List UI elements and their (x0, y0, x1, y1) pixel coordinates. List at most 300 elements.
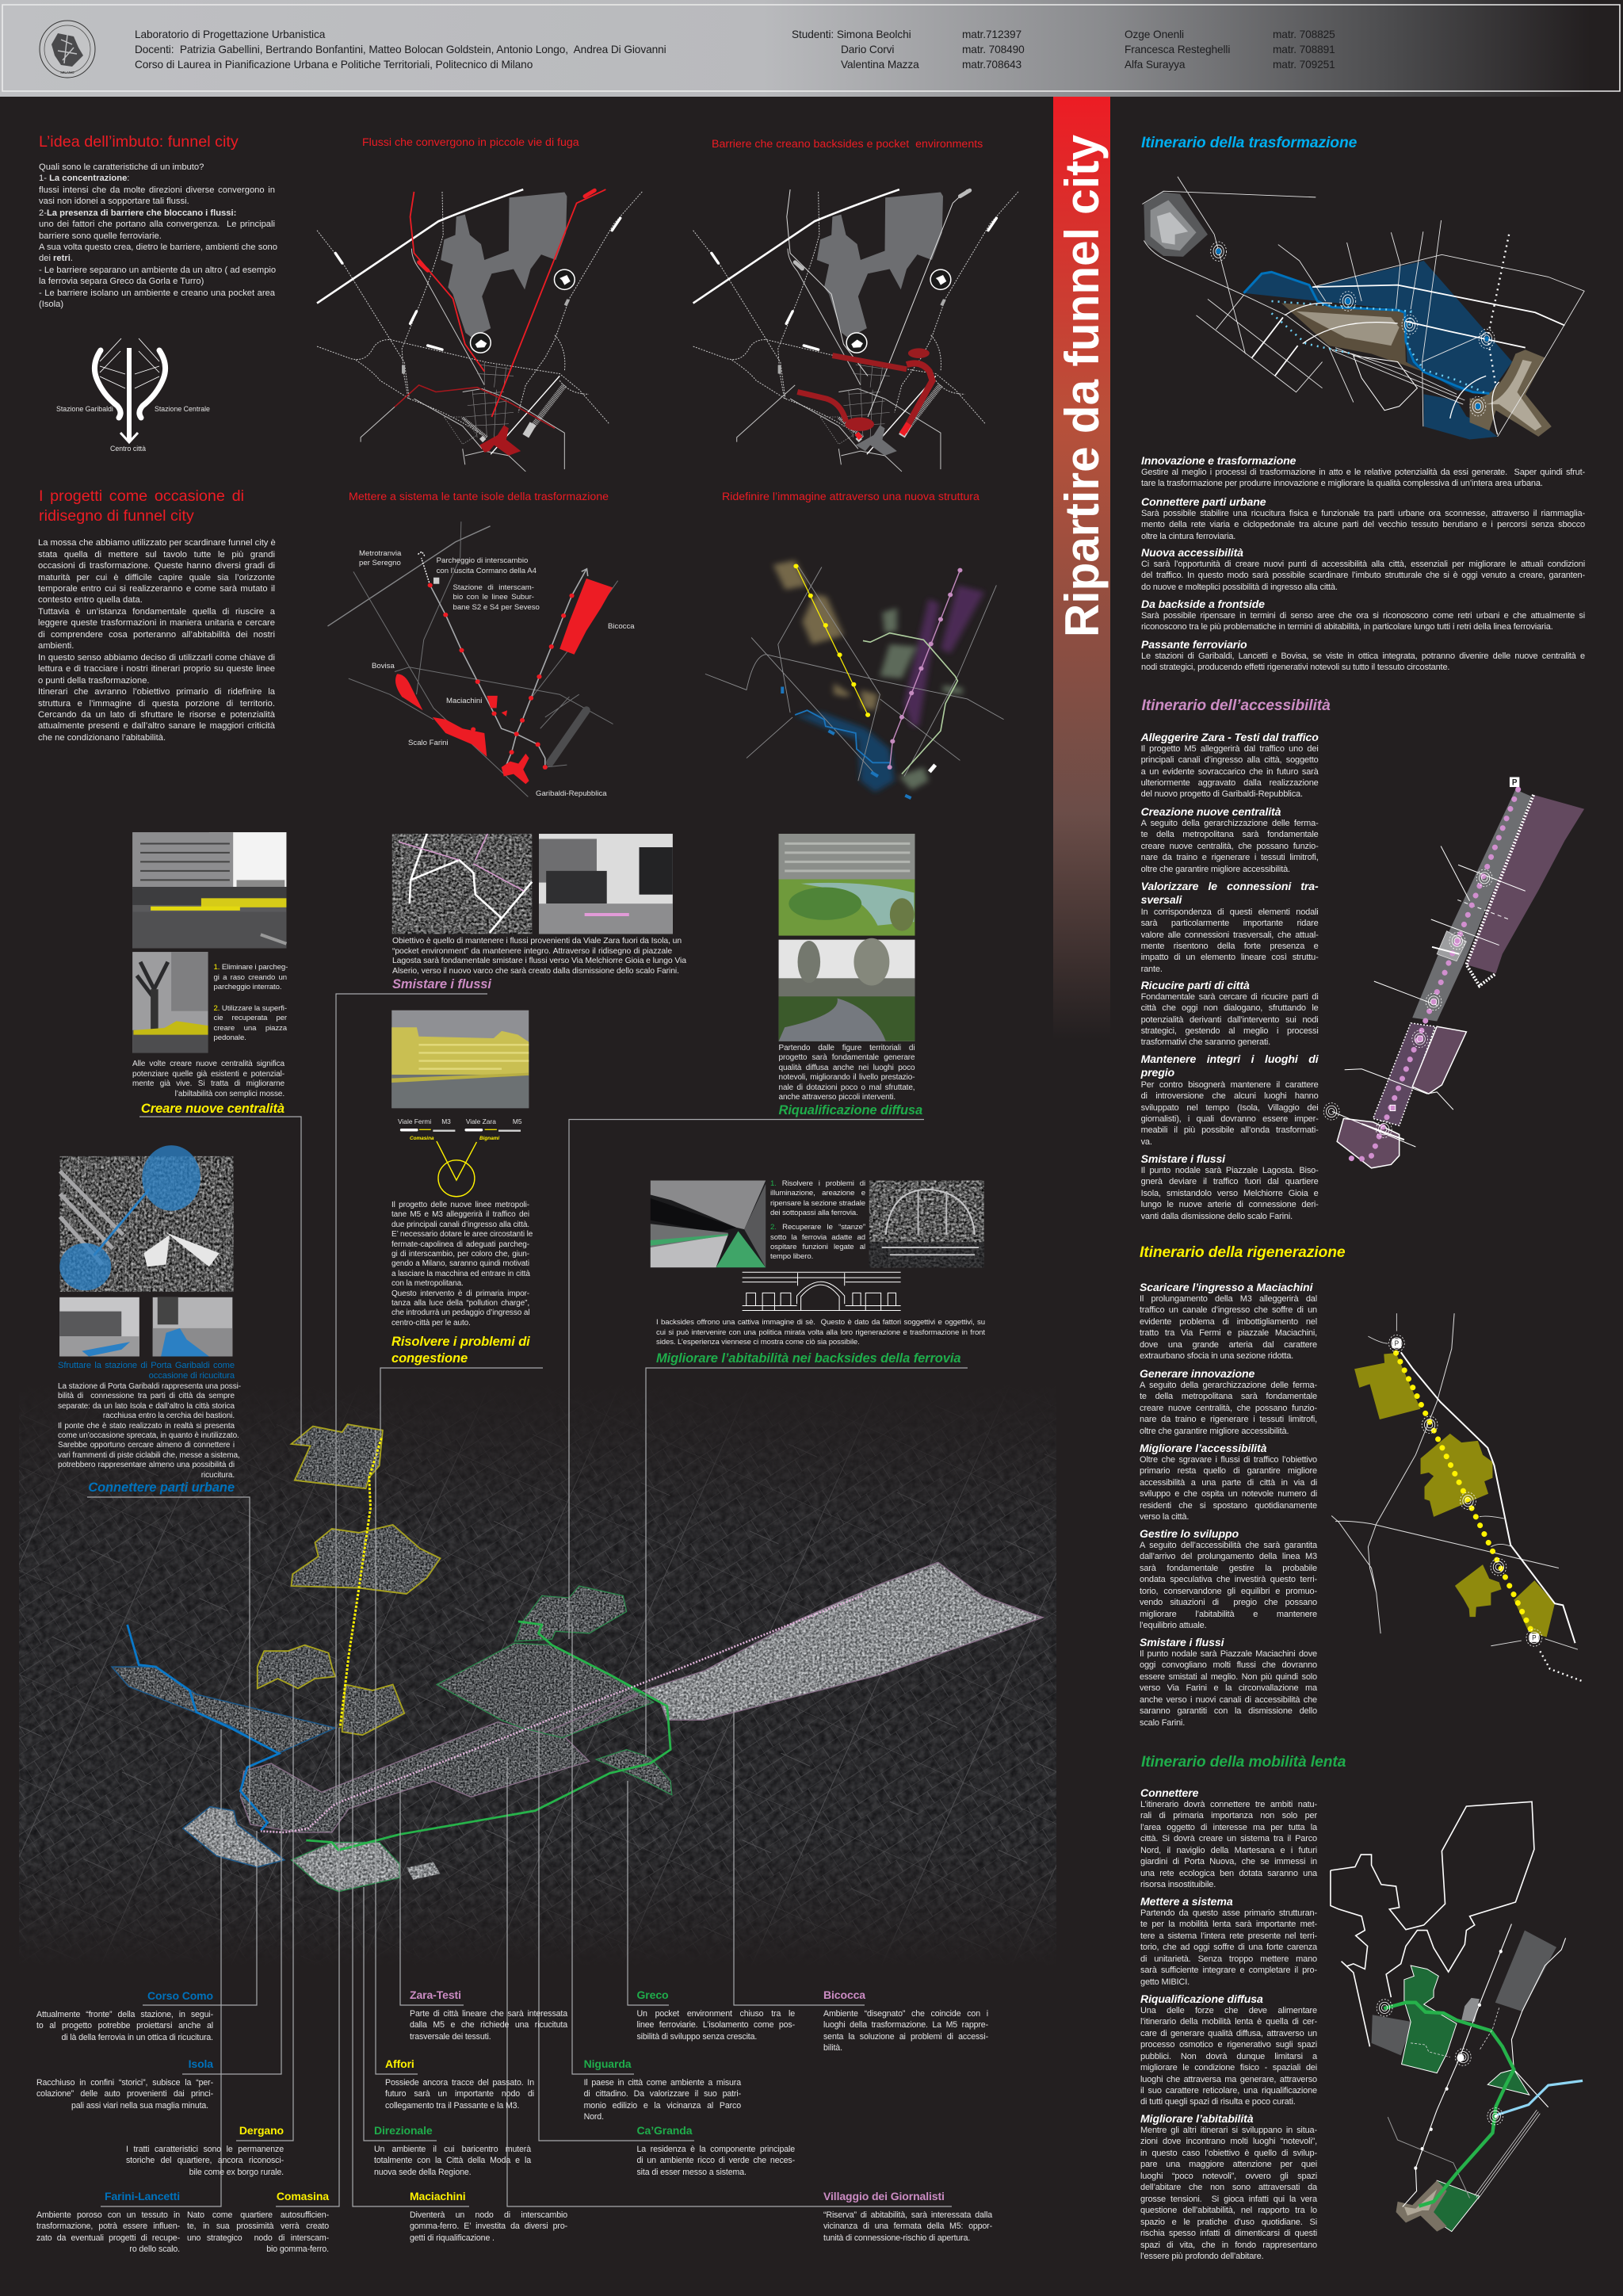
section: Passante ferroviario: nodi strategici, producendo effetti rigenerativi notevoli su tutto il tessuto circostante. (1141, 663, 1449, 672)
block: Zara-Testi (410, 1988, 567, 2042)
block: Ca'Granda: La residenza è la componente principale (637, 2145, 795, 2154)
map title: flows: Flussi che convergono in piccole vie di fuga (362, 136, 579, 149)
block: Niguarda: Il paese in città come ambiente a misura (584, 2078, 741, 2088)
header text: students first column (792, 29, 919, 70)
label: Centro citta: Centro città (110, 445, 146, 453)
section: Migliorare l'accessibilita: primario resta quello di garantire migliore (1140, 1466, 1317, 1476)
section: Mantenere integri i luoghi di pregio: meabili il più possibile all’onda trasformati- (1141, 1125, 1319, 1135)
block: Maciachini: gomma-ferro. E’ investita da diversi pro- (410, 2222, 567, 2231)
section: Migliorare l'accessibilita: accessibilità a una parte di città in via di (1140, 1478, 1317, 1488)
section: Connettere: una rete ecologica ben dotata saranno una (1140, 1869, 1317, 1878)
block: Villaggio dei Giornalisti: vicinanza di una fermata della M5: oppor- (823, 2222, 992, 2231)
header text: student numbers second column: matr. 708825 (1273, 29, 1335, 40)
title band (1053, 97, 1110, 1040)
block: Farini-Lancetti: trasformazione, potrà essere influen- (36, 2222, 180, 2231)
section: Migliorare l'accessibilita: Oltre che sgravare i flussi di traffico l’obiettivo (1140, 1455, 1317, 1465)
text: Porta Garibaldi station: ricucitura. (201, 1471, 235, 1480)
section: Nuova accessibilita: Nuova accessibilità (1141, 546, 1243, 559)
block: Niguarda: di cittadino. Da valorizzare il suo patri- (584, 2089, 741, 2099)
section: Migliorare l'abitabilita (1140, 2112, 1317, 2262)
section: Ricucire parti di citta: potenzialità derivanti dall’intervento sui nodi (1141, 1014, 1319, 1024)
text: projects: temporale entro cui si realizzeranno e come sarà mutato il (38, 584, 275, 594)
section: Generare innovazione: creare nuove centralità, che possano funzio- (1140, 1404, 1317, 1413)
labels: metro diagram top: Viale Fermi M3 Viale Zara M5 (398, 1117, 522, 1125)
section: Mettere a sistema: torio, che ad oggi soffre di una forte carenza (1140, 1943, 1317, 1952)
section: Migliorare l'accessibilita: Migliorare l’accessibilità (1140, 1442, 1266, 1454)
text: funnel idea: 2-La presenza di barriere che bloccano i flussi: barriere sono quelle ferroviarie. dei retri. la ferrovia separa Greco da Gorla e Turro) (Isola) (39, 208, 236, 309)
label: Bignami: Bignami (479, 1136, 499, 1141)
text: projects: In questo senso abbiamo deciso di utilizzarli come chiave di (38, 653, 275, 663)
photo: station building (59, 1297, 139, 1356)
text: funnel idea: Quali sono le caratteristiche di un imbuto? (39, 162, 204, 172)
text: create new centres (132, 1060, 285, 1098)
block: Corso Como: to al progetto potrebbe proiettarsi anche al (36, 2021, 213, 2030)
text: Porta Garibaldi station: Sfruttare la stazione di Porta Garibaldi come (58, 1360, 235, 1370)
section: Valorizzare le connessioni trasversali: Valorizzare le connessioni tra- (1141, 880, 1319, 892)
section: Riqualificazione diffusa: Una delle forze che deve alimentare (1140, 2006, 1317, 2015)
text: create new centres: Alle volte creare nuove centralità significa (132, 1060, 285, 1068)
text: solve congestion: fermate-capolinea di adeguati parcheg- (391, 1240, 529, 1249)
section: Valorizzare le connessioni trasversali: valore alle connessioni trasversali, che attual- (1141, 930, 1319, 940)
map label: Scalo Farini: Scalo Farini (408, 739, 449, 747)
section: Scaricare l'ingresso a Maciachini: Scaricare l’ingresso a Maciachini (1140, 1281, 1312, 1293)
map: slow mobility itinerary (1331, 1801, 1583, 2232)
block: Bicocca: bilità. (823, 2043, 842, 2053)
section: Mettere a sistema: sarà sufficiente integrare e completare il pro- (1140, 1966, 1317, 1975)
text: projects: attualmente presenti e dall’altro sanare le maggiori criticità (38, 721, 275, 731)
block: Comasina: Nato come quartiere autosufficien- (187, 2210, 329, 2220)
photo: yellow parking building (391, 1010, 529, 1108)
text: sort the flows: “pocket environment” da mantenere integro. Attraverso il ridisegno di piazzale (392, 946, 672, 956)
photo: Isola aerial with routes (392, 834, 532, 934)
block: Farini-Lancetti: zato da eventuali progetti di recupe- (36, 2233, 180, 2243)
text: Porta Garibaldi station (58, 1360, 241, 1480)
block: Bicocca (823, 1988, 988, 2054)
section: Da backside a frontside: Da backside a frontside (1141, 598, 1265, 610)
block: Greco (637, 1988, 795, 2042)
section: Gestire lo sviluppo: migliorare l’abitabilità e mantenere (1140, 1610, 1317, 1619)
header text: laboratory: Corso di Laurea in Pianificazione Urbana e Politiche Territoriali, Politecnico di Milano (135, 59, 533, 70)
section: Smistare i flussi (accessibility): Smistare i flussi (1141, 1152, 1225, 1165)
block: Dergano: I tratti caratteristici sono le permanenze (126, 2145, 284, 2154)
block: Zara-Testi: Zara-Testi (410, 1988, 461, 2001)
text: projects: Cercando da un lato di sfruttare le risorse e potenzialità (38, 710, 275, 720)
map label: Metrotranvia: Metrotranvia (359, 549, 401, 558)
text: backside steps: sotto la ferrovia adatte ad (770, 1233, 865, 1242)
section: Da backside a frontside: Sarà possibile ripensare in termini di senso aree che ora si riconoscono come retri urbani e che attualmente si (1141, 611, 1585, 621)
block: Direzionale: Un ambiente il cui baricentro muterà (374, 2145, 531, 2154)
section: Smistare i flussi (accessibility): gnerà deviare il traffico fuori dal quartiere (1141, 1177, 1319, 1186)
heading: transformation itinerary: Itinerario della trasformazione (1141, 135, 1357, 151)
header text: laboratory: Laboratorio di Progettazione Urbanistica (135, 29, 325, 40)
section: Smistare i flussi (regeneration): Il punto nodale sarà Piazzale Maciachini dove (1140, 1649, 1317, 1659)
block: Comasina: uno strategico nodo di interscam- (187, 2233, 329, 2243)
section: Migliorare l'abitabilita: pare una maggiore attenzione per quei (1140, 2160, 1317, 2169)
section: Valorizzare le connessioni trasversali: mente risentono della forte presenza e (1141, 942, 1319, 951)
district outlines: regeneration (258, 1424, 441, 1735)
text: backsides: I backsides offrono una cattiva immagine di sè. Questo è dato da fattori soggettivi e oggettivi, su (656, 1318, 985, 1327)
heading: create new centres: Creare nuove centralità (141, 1102, 285, 1116)
text: funnel idea: - Le barriere isolano un ambiente e creano una pocket area (39, 288, 275, 298)
heading: accessibility itinerary: Itinerario dell’accessibilità (1141, 697, 1331, 714)
text: create new centres steps: cie recuperata per (214, 1014, 287, 1022)
header text: student numbers first column (962, 29, 1025, 70)
section: Ricucire parti di citta: Ricucire parti di città (1141, 979, 1250, 991)
section: Smistare i flussi (regeneration): oggi convogliano molti flussi che dovranno (1140, 1660, 1317, 1670)
text: Porta Garibaldi station: bilità di connessione tra parti di città da sempre (58, 1392, 235, 1400)
section: Smistare i flussi (regeneration): saranno garantiti con la dismissione dello (1140, 1706, 1317, 1716)
heading: sort the flows: Smistare i flussi (392, 976, 491, 991)
header text: student numbers second column: matr. 709251 (1273, 59, 1335, 70)
section: Innovazione e trasformazione: Innovazione e trasformazione (1141, 454, 1296, 467)
map: regeneration itinerary (1331, 1313, 1583, 1681)
section: Ricucire parti di citta (1141, 979, 1319, 1049)
section: Smistare i flussi (accessibility): Isola, smistandolo verso Melchiorre Gioia e (1141, 1189, 1319, 1198)
text: backside steps (770, 1179, 865, 1261)
map title: structure: Ridefinire l’immagine attraverso una nuova struttura (722, 491, 980, 503)
text: funnel idea: 1- La concentrazione: vasi non idonei a sopportare tali flussi. (39, 174, 189, 206)
block: Villaggio dei Giornalisti (823, 2189, 992, 2244)
map label: Stazione di interscambio: bio con le linee Subur- (453, 593, 534, 602)
text: projects: lettura e di tracciare i nostri itinerari proprio su queste linee (38, 664, 275, 674)
block: Maciachini: Diventerà un nodo di interscambio (410, 2210, 567, 2220)
header band (0, 0, 1623, 97)
section: Innovazione e trasformazione (1141, 454, 1585, 490)
text: create new centres: potenziare quelle già esistenti e potenzial- (132, 1070, 285, 1078)
section: Creazione nuove centralita: creare nuove centralità, che possano funzio- (1141, 842, 1319, 851)
section: Gestire lo sviluppo: torio, conservandone gli equilibri e promuo- (1140, 1587, 1317, 1596)
section: Alleggerire Zara - Testi dal traffico: principali canali d’ingresso alla città, soggetto (1141, 755, 1319, 765)
heading: projects as an occasion (39, 487, 244, 525)
map: new structure (705, 560, 1004, 798)
photo: tree and square (132, 952, 208, 1053)
section: Mettere a sistema: te per la mobilità lenta sarà importante met- (1140, 1920, 1317, 1929)
block: Comasina: bio gomma-ferro. (266, 2244, 329, 2254)
section: Scaricare l'ingresso a Maciachini: tratto tra Via Fermi e piazzale Maciachini, (1140, 1328, 1317, 1338)
label: Comasina: Comasina (410, 1136, 434, 1141)
section: Mettere a sistema: Partendo da questo asse primario strutturan- (1140, 1908, 1317, 1918)
text: funnel idea: flussi intensi che da molte direzioni diverse convergono in (39, 185, 275, 195)
section: Alleggerire Zara - Testi dal traffico: ulteriormente aggravato dalla realizzazione (1141, 778, 1319, 788)
section: Smistare i flussi (regeneration): Smistare i flussi (1140, 1636, 1224, 1648)
section: Migliorare l'accessibilita: residenti che si spostano quotidianamente (1140, 1501, 1317, 1511)
districts: photo texture (112, 1424, 672, 1832)
text: Porta Garibaldi station: vari frammenti di piste ciclabili che, messe a sistema, (58, 1451, 240, 1460)
photo: restaurant under the railway (869, 1181, 984, 1267)
block: Ca'Granda: sita di esser messo a sistema. (637, 2167, 747, 2176)
block: Isola: pali assi viari nella sua maglia minuta. (71, 2101, 208, 2111)
section: Connettere (1140, 1786, 1317, 1890)
block: Isola: Racchiuso in confini “storici”, subisce la “per- (36, 2078, 213, 2088)
map title: islands: Mettere a sistema le tante isole della trasformazione (349, 491, 609, 503)
map label: Metrotranvia (359, 549, 401, 567)
block: Bicocca: Ambiente “disegnato” che coincide con i (823, 2009, 988, 2019)
section: Ricucire parti di citta: Fondamentale sarà cercare di ricucire parti di (1141, 992, 1319, 1002)
section: Smistare i flussi (regeneration) (1140, 1636, 1317, 1729)
section: Passante ferroviario: Le stazioni di Garibaldi, Lancetti e Bovisa, se viste in ottica integrata, potranno divenire delle nuove centralità e (1141, 651, 1585, 661)
section: Migliorare l'abitabilita: spazi di vita, che in fondo rappresentano (1140, 2241, 1317, 2250)
map label: Parcheggio: con l’uscita Cormano della A4 (437, 567, 537, 575)
section: Alleggerire Zara - Testi dal traffico (1141, 731, 1319, 800)
section: Riqualificazione diffusa: migliorare le condizione fisico - spaziali dei (1140, 2063, 1317, 2073)
text: create new centres: mente già vive. Si tratta di migliorarne (132, 1079, 285, 1088)
block: Zara-Testi: Parte di città lineare che sarà interessata (410, 2009, 567, 2019)
section: Valorizzare le connessioni trasversali: sarà particolarmente importante ridare (1141, 919, 1319, 928)
photo: pond (779, 834, 915, 936)
section: Connettere: rali di primaria importanza non solo per (1140, 1811, 1317, 1820)
block: Direzionale: Direzionale (374, 2124, 433, 2137)
map label: Bovisa: Bovisa (372, 661, 395, 670)
section: Mettere a sistema: getto MIBICI. (1140, 1977, 1190, 1987)
block: Direzionale: totalmente con la Città della Moda e la (374, 2156, 531, 2165)
text: funnel idea: - Le barriere separano un ambiente da un altro ( ad esempio (39, 266, 276, 275)
section: Generare innovazione (1140, 1367, 1317, 1437)
text: Porta Garibaldi station: separate: da un lato Isola e dall’altro la città storica (58, 1402, 235, 1411)
section: Mantenere integri i luoghi di pregio: di introversione che alcuni luoghi hanno (1141, 1091, 1319, 1101)
text: create new centres steps: 1. Eliminare i parcheg- parcheggio interrato. 2. Utilizzare la superfi- pedonale. (214, 963, 288, 1042)
text: sort the flows: Lagosta sarà fondamentale smistare i flussi verso Via Melchiorre Gioia e lungo Via (392, 957, 686, 965)
map: accessibility itinerary (1323, 777, 1584, 1168)
section: Riqualificazione diffusa: luoghi che attraversa ma generare, attraverso (1140, 2075, 1317, 2084)
section: Ricucire parti di citta: strategici, gestendo al meglio i processi (1141, 1026, 1319, 1036)
text: projects: di comprendere cosa porteranno all’abitabilità dei nostri (38, 630, 275, 640)
section: Mantenere integri i luoghi di pregio: giornalisti), i quali dovranno essere imper- (1141, 1114, 1319, 1124)
section: Migliorare l'abitabilita: luoghi “poco notevoli”, ovvero gli spazi (1140, 2172, 1317, 2181)
heading: solve congestion: congestione (391, 1351, 468, 1366)
block: Dergano (126, 2124, 284, 2176)
text: solve congestion: che introdurrà un pedaggio d’ingresso al (391, 1308, 529, 1317)
section: Smistare i flussi (accessibility): lungo le nuove arterie di connessione deri- (1141, 1200, 1319, 1209)
section: Connettere parti urbane: mento della rete viaria e ciclopedonale tra alcune parti del vecchio tessuto berutiano e i percorsi senza sbocco (1141, 520, 1585, 529)
section: Alleggerire Zara - Testi dal traffico: Alleggerire Zara - Testi dal traffico (1141, 731, 1319, 743)
section: Connettere: giardini di Porta Nuova, che se immessi in (1140, 1857, 1317, 1866)
text: funnel idea (39, 162, 277, 309)
block: Comasina: Comasina (277, 2190, 329, 2202)
block: Niguarda: Niguarda (584, 2057, 631, 2070)
route: transformation (128, 1625, 279, 1831)
section: Connettere parti urbane (1141, 495, 1585, 542)
section: Mettere a sistema: tere a sistema l’intera rete presente nel terri- (1140, 1931, 1317, 1941)
vertical title: Ripartire da funnel city (1056, 134, 1109, 637)
section: Mantenere integri i luoghi di pregio: sviluppato nel tempo (Isola, Villaggio dei (1141, 1103, 1319, 1113)
section: Alleggerire Zara - Testi dal traffico: Il progetto M5 alleggerirà dal traffico uno dei (1141, 744, 1319, 754)
text: solve congestion: tanza alla luce della “pollution charge”, (391, 1299, 529, 1308)
block: Isola (36, 2057, 214, 2111)
map label: Stazione di interscambio: Stazione di interscam- (453, 583, 534, 592)
map label: Metrotranvia: per Seregno (359, 559, 401, 567)
heading: projects as an occasion: I progetti come occasione di (39, 487, 244, 505)
section: Alleggerire Zara - Testi dal traffico: del nuovo progetto di Garibaldi-Repubblica. (1141, 789, 1303, 799)
block: Greco: Un pocket environment chiuso tra le (637, 2009, 795, 2019)
section: Gestire lo sviluppo: A seguito dell’accessibilità che sarà garantita (1140, 1541, 1317, 1550)
photo: blue cycle path (153, 1297, 232, 1356)
section: Mantenere integri i luoghi di pregio: pregio (1141, 1066, 1174, 1079)
text: diffuse requalification: anche attraverso piccoli interventi. (778, 1093, 896, 1102)
text: solve congestion: con la metropolitana. centro-città per le auto. (391, 1279, 471, 1328)
header text: students second column (1125, 29, 1230, 71)
section: Gestire lo sviluppo (1140, 1527, 1317, 1631)
header text: students second column: Alfa Surayya (1125, 59, 1185, 70)
text: backside steps: ripensare la sezione stradale (770, 1199, 865, 1208)
section: Migliorare l'abitabilita: questione dell’abitabilità, nel rapporto tra lo (1140, 2206, 1317, 2215)
district outlines: transformation (112, 1667, 335, 1867)
block: Ca'Granda: Ca’Granda (637, 2124, 692, 2137)
section: Connettere: Nord, il naviglio della Martesana e i futuri (1140, 1846, 1317, 1855)
section: Migliorare l'abitabilita: l’essere più profondo dell’abitare. (1140, 2252, 1263, 2261)
heading: connect urban parts: Connettere parti urbane (88, 1480, 235, 1495)
block: Affori: Affori (385, 2057, 414, 2070)
section: Scaricare l'ingresso a Maciachini: extraurbano sfocia in una sezione ridotta. (1140, 1351, 1293, 1361)
block: Niguarda (584, 2057, 741, 2123)
section: Smistare i flussi (accessibility): Il punto nodale sarà Piazzale Lagosta. Biso- (1141, 1166, 1319, 1175)
text: solve congestion: E’ necessario dotare le aree circostanti le (391, 1230, 533, 1239)
section: Mettere a sistema: Mettere a sistema (1140, 1895, 1233, 1908)
section: Gestire lo sviluppo: vendo situazioni di pregio che possano (1140, 1598, 1317, 1607)
block: Corso Como: Attualmente “fronte” della stazione, in segui- (36, 2010, 213, 2019)
icon: university seal (40, 21, 95, 78)
map label: Bicocca: Bicocca (608, 621, 635, 631)
section: Scaricare l'ingresso a Maciachini: traffico un canale d’ingresso che soffre di un (1140, 1305, 1317, 1315)
section: Migliorare l'abitabilita: Mentre gli altri itinerari si sviluppano in situa- (1140, 2126, 1317, 2135)
map label: Garibaldi-Repubblica: Garibaldi-Repubblica (536, 789, 607, 798)
section: Gestire lo sviluppo: dall’arrivo del prolungamento della linea M3 (1140, 1552, 1317, 1561)
map: barriers (693, 189, 1018, 472)
section: Generare innovazione: Generare innovazione (1140, 1367, 1254, 1380)
section: Creazione nuove centralita: oltre che garantire migliore accessibilità. (1141, 865, 1290, 874)
section: Da backside a frontside (1141, 598, 1589, 633)
section: Generare innovazione: A seguito della gerarchizzazione delle ferma- (1140, 1381, 1317, 1390)
map label: Stazione di interscambio: bane S2 e S4 per Seveso (453, 603, 540, 612)
text: funnel idea: A sua volta questo crea, dietro le barriere, ambienti che sono (39, 243, 277, 252)
block: Farini-Lancetti (36, 2190, 180, 2254)
block: Ca'Granda: di un ambiente ricco di verde che neces- (637, 2156, 795, 2165)
map label: Parcheggio: Parcheggio di interscambio (437, 556, 528, 565)
section: Generare innovazione: oltre che garantire migliore accessibilità. (1140, 1427, 1289, 1436)
text: diffuse requalification: nale di dotazioni poco o mal sfruttate, (778, 1083, 915, 1092)
section: Creazione nuove centralita: nare da traino e rigenerare i tessuti limitrofi, (1141, 853, 1319, 862)
block: Corso Como (36, 1989, 213, 2042)
photo: park path (779, 938, 915, 1041)
section: Gestire lo sviluppo: l’equilibrio attuale. (1140, 1621, 1206, 1630)
section: Migliorare l'abitabilita: rischia spesso infatti di dimenticarsi di questi (1140, 2229, 1317, 2238)
header text: student numbers second column (1273, 29, 1335, 70)
map: accessibility itinerary: P (1512, 778, 1518, 787)
block: Niguarda: monio edilizio e la vicinanza al Parco (584, 2101, 741, 2111)
section: Riqualificazione diffusa: care di generare qualità diffusa, attraverso un (1140, 2029, 1317, 2038)
photo: Porta Garibaldi aerial (59, 1145, 234, 1292)
section: Riqualificazione diffusa: l’itinerario della mobilità lenta è quella di cer- (1140, 2017, 1317, 2027)
heading: solve congestion (391, 1335, 530, 1366)
heading: funnel idea: L’idea dell’imbuto: funnel city (39, 133, 239, 151)
header text: students first column: Studenti: Simona Beolchi (792, 29, 911, 40)
section: Connettere: risorsa insostituibile. (1140, 1880, 1216, 1889)
section: Riqualificazione diffusa: pubblici. Non dovrà dunque limitarsi a (1140, 2052, 1317, 2061)
map label: Stazione di interscambio (453, 583, 540, 612)
section: Migliorare l'abitabilita: grosse tensioni. Si gioca infatti qui la vera (1140, 2195, 1317, 2204)
section: Ricucire parti di citta: trasformativi che saranno generati. (1141, 1037, 1270, 1047)
section: Valorizzare le connessioni trasversali (1141, 880, 1319, 975)
text: diffuse requalification: Partendo dalle figure territoriali di (778, 1044, 915, 1052)
text: backsides (656, 1318, 985, 1347)
text: solve congestion: due principali canali d’ingresso alla città. (391, 1221, 529, 1229)
header text: students second column: Francesca Resteghelli (1125, 43, 1230, 55)
section: Valorizzare le connessioni trasversali: rante. (1141, 965, 1163, 974)
section: Migliorare l'abitabilita: zioni dove incontrano molti luoghi “notevoli”, (1140, 2137, 1317, 2146)
text: diffuse requalification: qualità diffusa anche nei luoghi poco (778, 1064, 915, 1072)
label: Stazione Centrale: Stazione Centrale (155, 405, 210, 413)
section: Riqualificazione diffusa: il suo carattere reticolare, una riqualificazione (1140, 2086, 1317, 2095)
text: backside steps: dei sottopassi alla ferrovia. tempo libero. (770, 1209, 858, 1261)
section: Gestire lo sviluppo: ondata speculativa che investirà questo terri- (1140, 1575, 1317, 1584)
text: Porta Garibaldi station: potrebbero rappresentare almeno una possibilità di (58, 1461, 235, 1469)
text: diffuse requalification: notevoli, migliorando il livello prestazio- (778, 1073, 915, 1082)
map: flows converging (317, 189, 642, 472)
section: Smistare i flussi (accessibility) (1141, 1152, 1319, 1222)
text: Porta Garibaldi station: Sarebbe opportuno cercare almeno di connettere i (58, 1441, 235, 1450)
text: backside steps: 2. Recuperare le “stanze” (770, 1223, 865, 1232)
section: Connettere parti urbane: Connettere parti urbane (1141, 495, 1266, 508)
section: Innovazione e trasformazione: tare la trasformazione per produrre innovazione e migliorare la qualità complessiva di un’intera area urbana. (1141, 479, 1543, 488)
block: Affori: futuro sarà un importante nodo di (385, 2089, 534, 2099)
section: Creazione nuove centralita (1141, 805, 1319, 875)
label: Stazione Garibaldi: Stazione Garibaldi (56, 405, 113, 413)
text: projects: maturità per cui è difficile capire quale sia l’orizzonte (38, 573, 275, 583)
text: Porta Garibaldi station: La stazione di Porta Garibaldi rappresenta una possi- (58, 1382, 241, 1391)
block: Bicocca: luoghi della trasformazione. La M5 rappre- (823, 2020, 988, 2030)
section: Mantenere integri i luoghi di pregio: Mantenere integri i luoghi di (1141, 1052, 1319, 1065)
text: solve congestion: Il progetto delle nuove linee metropoli- (391, 1201, 529, 1209)
text: backside steps: 1. Risolvere i problemi di (770, 1179, 865, 1188)
leader lines (87, 994, 968, 2206)
text: projects: Tuttavia è un’istanza fondamentale quella di riuscire a (38, 607, 275, 617)
heading: diffuse requalification: Riqualificazione diffusa (778, 1103, 922, 1117)
text: create new centres steps: creare una piazza (214, 1024, 287, 1032)
aerial: highlighted districts and routes (112, 1424, 1043, 1892)
text: Porta Garibaldi station: racchiusa entro la cerchia dei bastioni. (103, 1412, 235, 1420)
text: backsides: sides. L’esperienza viennese ci mostra come ciò sia possibile. (656, 1338, 860, 1347)
map title: barriers: Barriere che creano backsides e pocket environments (712, 138, 983, 151)
funnel diagram (94, 338, 166, 442)
block: Dergano: bile come ex borgo rurale. (189, 2167, 284, 2176)
text: solve congestion: Questo intervento è di primaria impor- (391, 1289, 529, 1298)
block: Greco: sibilità di sviluppo senza crescita. (637, 2032, 757, 2042)
section: Nuova accessibilita: del traffico. In questo modo sarà possibile scardinare l’imbuto strutturale che si è oggi venuto a creare, garanten- (1141, 571, 1585, 580)
text: create new centres: l’abiltabilità con semplici mosse. (175, 1089, 285, 1098)
block: Maciachini: Maciachini (410, 2190, 466, 2202)
block: Direzionale (374, 2124, 531, 2176)
photo: street with parking (132, 832, 286, 948)
text: backside steps: illuminazione, areazione e (770, 1189, 865, 1198)
block: Farini-Lancetti: Farini-Lancetti (105, 2190, 180, 2202)
section: Connettere parti urbane: Sarà possibile stabilire una ricucitura fisica e funzionale tra parti urbane ora sconnesse, attraverso il riammaglia- (1141, 509, 1585, 518)
section: Nuova accessibilita: do nuove e molteplici possibilità di ingresso alla città. (1141, 583, 1338, 592)
diagram: metro lines and congestion charge (402, 1129, 521, 1197)
section: Scaricare l'ingresso a Maciachini (1140, 1281, 1317, 1362)
section: Migliorare l'accessibilita (1140, 1442, 1317, 1523)
block: Comasina: te, in sua prossimità verrà creato (187, 2222, 329, 2231)
section: Innovazione e trasformazione: Gestire al meglio i processi di trasformazione in atto e le relative potenzialità da essi generate. Saper quindi sfrut- (1141, 468, 1585, 477)
text: sort the flows (392, 937, 686, 975)
section: Ricucire parti di citta: città che oggi non dialogano, sfruttando le (1141, 1003, 1319, 1013)
block: Greco: Greco (637, 1988, 668, 2001)
section: Migliorare l'abitabilita: dell’abitare che non sono attraversati da (1140, 2183, 1317, 2192)
header text: students first column: Valentina Mazza (841, 59, 919, 70)
section: Mettere a sistema (1140, 1895, 1317, 1988)
text: projects: struttura e l’immagine di questa porzione di territorio. (38, 699, 275, 709)
heading: backsides: Migliorare l’abitabilità nei backsides della ferrovia (656, 1350, 960, 1365)
block: Bicocca: senta la soluzione ai problemi di accessi- (823, 2032, 988, 2042)
section: Migliorare l'abitabilita: Migliorare l’abitabilità (1140, 2112, 1253, 2125)
